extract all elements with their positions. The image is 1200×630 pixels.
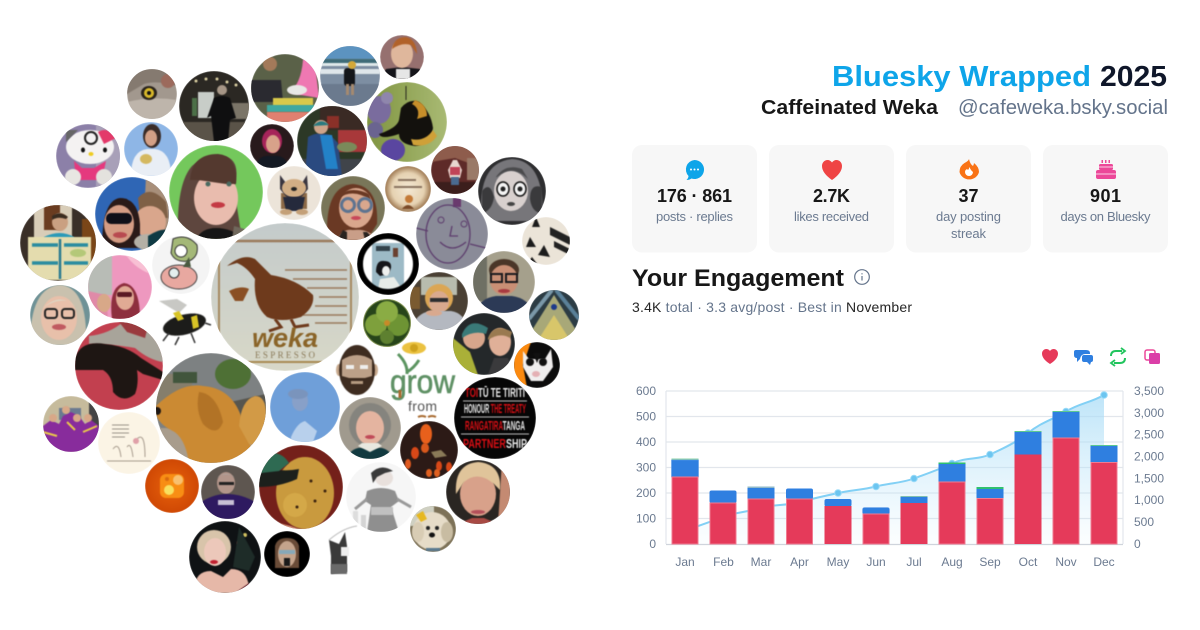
avatar: woman in sunglasses with boy bbox=[95, 177, 169, 251]
avatar: gir on a pig bbox=[152, 236, 210, 294]
avatar: grow from logo: from bbox=[408, 398, 437, 414]
avatar: celtic clover bbox=[363, 299, 411, 347]
title: 2025 bbox=[1100, 61, 1167, 93]
monthly stacked bars bbox=[672, 411, 1118, 544]
avatar: ginger man bbox=[380, 35, 424, 79]
month labels: Apr bbox=[790, 555, 809, 569]
avatar: two women in beanie bbox=[453, 313, 515, 375]
avatar: hazy blue sky portrait bbox=[270, 372, 340, 442]
profile name and handle: @cafeweka.bsky.social bbox=[958, 97, 1168, 119]
avatar: toitu te tiriti poster: RANGATIRATANGA bbox=[465, 418, 525, 433]
stat card: streak: day posting bbox=[936, 209, 1001, 224]
avatar: woman with big glasses bbox=[321, 176, 385, 240]
avatar: cookie in glove bbox=[259, 445, 343, 529]
stat card: streak: 37 bbox=[958, 186, 978, 206]
month labels: Aug bbox=[941, 555, 963, 569]
avatar: child's drawing bbox=[416, 198, 488, 270]
avatar: bitmoji on black bbox=[264, 531, 310, 577]
month labels: May bbox=[827, 555, 849, 569]
title: Bluesky Wrapped bbox=[832, 61, 1091, 93]
left axis labels: 0 bbox=[649, 537, 656, 551]
avatar: toitu te tiriti poster: TOITŪ TE TIRITI bbox=[465, 385, 525, 400]
avatar: red lanterns bbox=[400, 421, 458, 479]
avatar: woman with painting bbox=[20, 205, 96, 281]
bar: May bbox=[824, 499, 852, 544]
month labels: Feb bbox=[713, 555, 734, 569]
icon: quotes legend bbox=[1145, 350, 1160, 364]
avatar: white dog with flower bbox=[410, 506, 456, 552]
heading: your engagement: Your Engagement bbox=[632, 265, 844, 292]
avatar cluster bbox=[20, 35, 579, 593]
cumulative line bbox=[685, 392, 1107, 531]
month labels: Jun bbox=[866, 555, 886, 569]
stat card: likes: likes received bbox=[794, 209, 869, 224]
left axis labels: 400 bbox=[636, 435, 656, 449]
stat card: days on bluesky: days on Bluesky bbox=[1060, 209, 1151, 224]
bar: Jan bbox=[672, 458, 698, 544]
month labels: Nov bbox=[1055, 555, 1077, 569]
month labels: Mar bbox=[751, 555, 771, 569]
avatar: orange app icon bbox=[145, 459, 199, 513]
engagement summary: 3.4K total · 3.3 avg/post · Best in November bbox=[632, 299, 912, 315]
cumulative area bbox=[685, 395, 1104, 544]
month labels bbox=[675, 555, 1115, 569]
icon: heart bbox=[822, 160, 842, 180]
left axis labels: 300 bbox=[636, 460, 656, 474]
avatar: bearded bitmoji bbox=[336, 345, 378, 395]
avatar: red haired woman bbox=[250, 124, 294, 168]
bar: Aug bbox=[938, 462, 966, 544]
icon: info bbox=[855, 270, 869, 284]
bar: Apr bbox=[786, 488, 813, 544]
chart legend bbox=[1042, 348, 1160, 366]
avatar: weka espresso logo (large centre) bbox=[211, 223, 359, 371]
right axis labels: 3,000 bbox=[1134, 406, 1164, 420]
avatar: coffee iv drip poster, selected ring bbox=[357, 233, 419, 295]
avatar: french bulldog bbox=[267, 166, 321, 220]
right axis labels: 500 bbox=[1134, 515, 1154, 529]
icon: reposts legend bbox=[1111, 348, 1125, 366]
avatar: black cat under blanket bbox=[75, 322, 163, 410]
avatar: toitu te tiriti poster: PARTNERSHIP bbox=[463, 436, 527, 451]
right axis labels: 3,500 bbox=[1134, 384, 1164, 398]
avatar: blonde woman with glasses bbox=[30, 285, 90, 345]
avatar: grow from logo bbox=[390, 342, 455, 417]
avatar: bumblebee on lavender bbox=[367, 82, 447, 162]
avatar: woman in grey hoodie bbox=[410, 272, 468, 330]
avatar: woman with bird bbox=[297, 106, 367, 177]
stat card: days on bluesky: 901 bbox=[1090, 186, 1121, 206]
icon: likes legend bbox=[1042, 349, 1058, 364]
stat card: streak: streak bbox=[951, 226, 986, 241]
avatar: beach bbox=[320, 46, 380, 106]
right axis labels: 0 bbox=[1134, 537, 1141, 551]
avatar: black and white cat on orange bbox=[514, 342, 560, 388]
avatar: woman on blue bbox=[124, 122, 178, 176]
right axis labels: 1,500 bbox=[1134, 472, 1164, 486]
avatar: toitu te tiriti poster bbox=[454, 377, 536, 459]
left axis labels: 500 bbox=[636, 410, 656, 424]
avatar: black and white fabric bbox=[522, 217, 570, 265]
stat card: streak bbox=[906, 145, 1031, 252]
icon: flame bbox=[960, 159, 979, 179]
stat card: likes: 2.7K bbox=[813, 186, 850, 206]
month labels: Jul bbox=[906, 555, 922, 569]
avatar: weka espresso logo (large centre): ESPRESSO bbox=[255, 350, 316, 360]
bar: Sep bbox=[976, 487, 1004, 544]
bar: Jul bbox=[900, 496, 928, 544]
bar: Nov bbox=[1052, 411, 1080, 544]
stat card: posts and replies: 176 · 861 bbox=[657, 186, 732, 206]
avatar: cream cartoon bbox=[98, 412, 160, 474]
engagement chart bbox=[636, 384, 1164, 569]
avatar: man in purple shirt bbox=[201, 465, 255, 519]
profile name and handle: Caffeinated Weka bbox=[761, 97, 939, 119]
avatar: bee illustration bbox=[159, 299, 211, 345]
month labels: Sep bbox=[979, 555, 1001, 569]
right axis labels: 2,000 bbox=[1134, 450, 1164, 464]
left axis labels: 100 bbox=[636, 512, 656, 526]
avatar: blonde woman with bob bbox=[446, 460, 510, 524]
avatar: gold and blue art bbox=[529, 290, 579, 340]
bar: Jun bbox=[862, 508, 890, 544]
month labels: Dec bbox=[1093, 555, 1115, 569]
month labels: Jan bbox=[675, 555, 695, 569]
left axis labels: 200 bbox=[636, 486, 656, 500]
stat card: days on bluesky bbox=[1043, 145, 1168, 252]
right axis labels: 2,500 bbox=[1134, 428, 1164, 442]
avatar: cream book cover bbox=[385, 166, 431, 212]
right axis labels: 1,000 bbox=[1134, 493, 1164, 507]
avatar: toitu te tiriti poster: HONOUR THE TREATY bbox=[464, 401, 526, 416]
month labels: Oct bbox=[1019, 555, 1038, 569]
stat card: likes bbox=[769, 145, 894, 252]
right axis labels bbox=[1134, 384, 1164, 551]
icon: chat bubble bbox=[686, 160, 704, 180]
avatar: weka espresso logo (large centre): weka bbox=[252, 323, 318, 353]
avatar: owl bbox=[127, 69, 177, 119]
avatar: vintage milk illustration bbox=[346, 462, 416, 532]
avatar: woman with pink plush bbox=[251, 54, 319, 122]
avatar: blonde woman heart hands bbox=[189, 521, 261, 593]
stat card: posts and replies bbox=[632, 145, 757, 252]
avatar: older woman with curls bbox=[339, 397, 401, 459]
avatar: woman on pink bbox=[88, 255, 152, 319]
bar: Mar bbox=[748, 486, 774, 544]
bar: Oct bbox=[1014, 431, 1042, 544]
left axis labels bbox=[636, 384, 656, 551]
avatar: golden retrievers bbox=[153, 353, 266, 463]
avatar: woman on green bbox=[169, 145, 263, 239]
icon: replies legend bbox=[1074, 350, 1093, 365]
stat card: posts and replies: posts · replies bbox=[656, 209, 734, 224]
avatar: witch hat cat sketch bbox=[329, 526, 357, 574]
bar: Feb bbox=[710, 490, 736, 544]
profile name and handle bbox=[761, 97, 1168, 119]
avatar: woman in black bbox=[179, 71, 250, 142]
avatar: mug figure bbox=[431, 146, 479, 194]
avatar: purple tracksuits group bbox=[43, 396, 99, 452]
avatar: grow from logo: grow bbox=[390, 363, 455, 400]
bar: Dec bbox=[1090, 445, 1118, 544]
left axis labels: 600 bbox=[636, 384, 656, 398]
avatar: woman with black glasses bbox=[473, 251, 535, 313]
icon: birthday cake bbox=[1096, 160, 1116, 179]
avatar: punk hello kitty bbox=[56, 124, 120, 188]
avatar: gothic anime girl bbox=[478, 157, 546, 225]
